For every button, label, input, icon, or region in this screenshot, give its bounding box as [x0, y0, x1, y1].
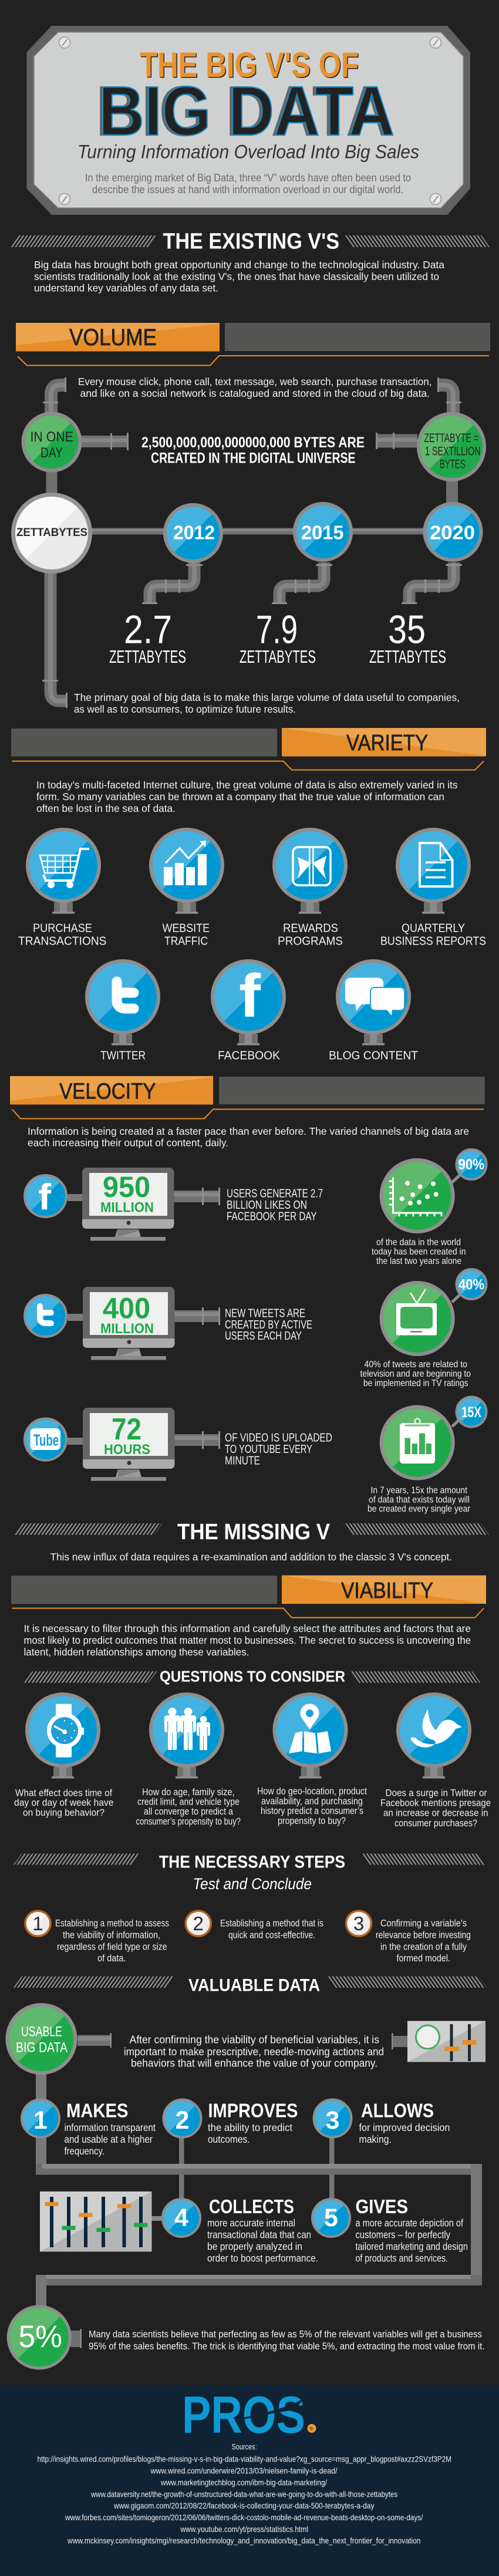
caption: What effect does time of: [15, 1788, 112, 1799]
text: the ability to predict: [208, 2122, 292, 2133]
caption: In 7 years, 15x the amount: [371, 1485, 467, 1496]
caption: an increase or decrease in: [383, 1808, 488, 1819]
question: social surge: [380, 1694, 491, 1829]
stat: 7.9 zettabytes: 7.9: [256, 607, 298, 652]
sources: www.dataversity.net/the-growth-of-unstructured-data-what-are-we-going-to-do-with-all-those-zettabytes: [90, 2489, 397, 2499]
monitor: 400 million: MILLION: [100, 1321, 154, 1337]
subheading: test and conclude: Test and Conclude: [193, 1875, 312, 1893]
step: makes: MAKES: [66, 2099, 128, 2122]
step: makes: [22, 2099, 156, 2157]
label: [278, 922, 343, 948]
heading: the existing v's: [9, 229, 490, 254]
step: allows: ALLOWS: [361, 2099, 434, 2122]
text: [376, 1917, 471, 1964]
text: variety intro: [36, 779, 458, 814]
caption: on buying behavior?: [23, 1808, 104, 1818]
circle: in one day: DAY: [41, 445, 63, 461]
label: REWARDS: [283, 922, 338, 935]
label: PURCHASE: [33, 922, 92, 935]
text: Confirming a variable’s: [380, 1917, 467, 1929]
label: FACEBOOK: [218, 1050, 281, 1063]
text: NEW TWEETS ARE: [225, 1307, 305, 1320]
icon: control panel: [407, 2021, 485, 2062]
section bar: viability: [11, 1576, 486, 1618]
text: variety intro: form. So many variables can be thrown at a company that the true value of information can: [36, 791, 444, 803]
icon: facebook circle: [25, 1175, 66, 1218]
text: [227, 1187, 323, 1223]
text: missing v intro: This new influx of data requires a re-examination and addition to the classic 3 V's concept.: [50, 1551, 452, 1563]
step: gives: GIVES: [356, 2196, 408, 2217]
logo: pros: ®: [309, 2426, 313, 2432]
stat: 90%: [372, 1149, 486, 1266]
icon item: purchase transactions: [18, 830, 107, 948]
icon: watch: [47, 1704, 84, 1758]
circle: 2012: [165, 505, 221, 561]
icon item: twitter: [87, 961, 159, 1063]
text: velocity intro: Information is being created at a faster pace than ever before. The varied channels of big data are: [28, 1125, 469, 1137]
heading: the missing v: [14, 1520, 489, 1545]
question: geo-location: [257, 1694, 367, 1826]
label: [18, 922, 107, 948]
text: for improved decision: [359, 2122, 450, 2133]
circle: 5%: 5%: [19, 2319, 62, 2354]
text: existing v's intro: [34, 259, 444, 294]
icon: youtube circle: Tube: [33, 1431, 59, 1449]
heading: valuable data: VALUABLE DATA: [188, 1976, 320, 1995]
icon: facebook circle: f: [38, 1177, 51, 1218]
text: 5% explanation: [89, 2328, 485, 2352]
text: be properly analyzed in: [207, 2240, 302, 2252]
caption: consumer purchases?: [395, 1818, 477, 1829]
monitor: 400 million: [83, 1287, 175, 1360]
caption: history predict a consumer’s: [261, 1806, 363, 1816]
icon item: quarterly business reports: [380, 830, 486, 948]
pipes: [68, 1307, 220, 1325]
circle: zettabyte definition: [419, 414, 484, 480]
circle: 5%: [8, 2307, 70, 2368]
text: viability intro: [23, 1623, 471, 1658]
text: [208, 2122, 292, 2145]
caption: of the data in the world: [376, 1238, 461, 1247]
text: every mouse click: [78, 376, 432, 399]
badge: 15X: [461, 1404, 481, 1421]
text: regardless of field type or size: [57, 1941, 167, 1953]
sources: www.mckinsey.com/insights/mgi/research/technology_and_innovation/big_data_the_next_frontier_for_innovation: [67, 2536, 420, 2545]
stat: 35 zettabytes: 35: [388, 607, 426, 652]
caption: Facebook mentions presage: [380, 1798, 491, 1808]
text: after confirming: After confirming the viability of beneficial variables, it is: [129, 2034, 379, 2045]
caption: be created every single year: [367, 1504, 471, 1514]
text: variety intro: In today’s multi-faceted Internet culture, the great volume of data is also extremely varied in its: [36, 779, 458, 791]
monitor: 72 hours: HOURS: [104, 1442, 150, 1458]
text: primary goal: [74, 692, 460, 715]
step: makes: 1: [33, 2106, 48, 2135]
caption: day or day of week have: [14, 1798, 114, 1808]
monitor: 950 million: 950: [103, 1171, 150, 1203]
label: WEBSITE: [162, 922, 210, 935]
text: after confirming: [124, 2034, 384, 2069]
text: existing v's intro: understand key variables of any data set.: [34, 282, 218, 294]
stat: 2.7 zettabytes: ZETTABYTES: [109, 646, 186, 667]
text: transactional data that can: [207, 2228, 311, 2240]
badge: [457, 1149, 486, 1179]
icon: map pin: [289, 1704, 331, 1754]
icon item: facebook: [213, 961, 284, 1063]
stat: 7.9 zettabytes: ZETTABYTES: [240, 646, 316, 667]
circle: 2020: [425, 504, 481, 560]
icon: youtube circle: [25, 1418, 66, 1461]
text: [220, 1917, 323, 1941]
section bar: variety: [11, 728, 486, 770]
text: MINUTE: [225, 1455, 260, 1468]
icon: facebook f: f: [239, 962, 261, 1030]
caption: credit limit, and vehicle type: [137, 1796, 240, 1807]
stat: 40%: [360, 1269, 486, 1388]
row: new tweets: [25, 1287, 312, 1360]
step: improves: [163, 2099, 298, 2145]
stat: 15x: [367, 1397, 486, 1514]
title plaque: [27, 26, 470, 215]
text: bytes created: 2,500,000,000,000000,000 BYTES ARE: [141, 434, 365, 451]
text: frequency.: [65, 2145, 104, 2157]
circle: in one day: [23, 413, 80, 471]
sources: www.gigaom.com/2012/08/22/facebook-is-collecting-your-data-500-terabytes-a-day: [113, 2501, 375, 2510]
text: CREATED BY ACTIVE: [225, 1319, 312, 1331]
text: [359, 2122, 450, 2145]
text: the viability of information,: [63, 1929, 160, 1941]
caption: propensity to buy?: [278, 1816, 346, 1826]
text: viability intro: It is necessary to filter through this information and carefully select the attributes and factors that are: [23, 1623, 471, 1634]
text: [356, 2217, 468, 2264]
monitor: 950 million: MILLION: [100, 1200, 154, 1215]
icon item: rewards programs: [274, 830, 346, 948]
icon: gift: [293, 847, 331, 885]
pipes: [68, 1188, 220, 1205]
badge: 90%: [458, 1156, 484, 1173]
icon: twitter t: [117, 982, 134, 1009]
caption: [360, 1360, 471, 1388]
text: BILLION LIKES ON: [227, 1199, 307, 1212]
caption: [257, 1786, 367, 1826]
section bar: volume: VOLUME: [69, 325, 157, 350]
text: customers – for perfectly: [356, 2228, 450, 2240]
caption: television and are beginning to: [360, 1369, 471, 1379]
section bar: variety: VARIETY: [346, 731, 428, 756]
caption: today has been created in: [372, 1247, 466, 1257]
sources: [38, 2442, 451, 2545]
icon: shopping cart: [40, 849, 89, 888]
caption: How do geo-location, product: [257, 1786, 367, 1796]
text: of data.: [97, 1953, 126, 1964]
stat: 2.7 zettabytes: [109, 607, 186, 667]
caption: be implemented in TV ratings: [363, 1378, 468, 1388]
caption: availability, and purchasing: [261, 1796, 363, 1807]
text: after confirming: important to make prescriptive, needle-moving actions and: [124, 2045, 384, 2058]
caption: [372, 1238, 466, 1266]
caption: consumer’s propensity to buy?: [136, 1816, 241, 1827]
logo: pros: PROS: [182, 2385, 305, 2444]
text: quick and cost-effective.: [228, 1929, 315, 1941]
label: BUSINESS REPORTS: [380, 935, 486, 948]
label: BLOG CONTENT: [329, 1050, 418, 1063]
row: youtube hours: [25, 1408, 332, 1481]
circle: usable big data: [7, 2005, 75, 2073]
circle: 2012: 2012: [173, 521, 215, 544]
step 1: [25, 1911, 169, 1964]
caption: [380, 1788, 491, 1829]
heading: questions to consider: [24, 1667, 480, 1685]
text: primary goal: The primary goal of big data is to make this large volume of data useful to companies,: [74, 692, 460, 703]
caption: of data that exists today will: [369, 1495, 470, 1505]
step 3: 3: [353, 1913, 364, 1934]
heading: the missing v: THE MISSING V: [177, 1520, 331, 1545]
step 3: [346, 1911, 471, 1964]
caption: all converge to predict a: [144, 1806, 234, 1817]
circle: zettabytes: [13, 494, 90, 572]
pipes: [68, 1431, 220, 1449]
stat: 35 zettabytes: ZETTABYTES: [369, 646, 446, 667]
text: every mouse click: Every mouse click, phone call, text message, web search, purchase transaction,: [78, 376, 432, 387]
pipes: valuable data network: [36, 2033, 482, 2348]
badge: 40%: [458, 1276, 484, 1293]
text: [55, 1917, 169, 1964]
sources: www.marketingtechblog.com/ibm-big-data-marketing/: [160, 2477, 327, 2487]
text: [225, 1431, 332, 1468]
label: [162, 922, 210, 948]
step: collects: COLLECTS: [209, 2196, 294, 2217]
step: gives: 5: [324, 2204, 338, 2232]
title: the big v's of: THE BIG V'S OF: [140, 45, 359, 85]
text: relevance before investing: [376, 1929, 471, 1941]
icon: twitter circle: [25, 1295, 66, 1337]
caption: 40% of tweets are related to: [364, 1360, 467, 1370]
text: bytes created: [141, 434, 365, 466]
text: making.: [359, 2133, 392, 2145]
text: tailored marketing and design: [356, 2240, 468, 2252]
circle: zettabyte definition: BYTES: [440, 458, 465, 471]
step: allows: [313, 2099, 450, 2145]
step: allows: 3: [326, 2106, 339, 2135]
icon item: blog content: [329, 961, 418, 1063]
icon: sliders panel: [40, 2191, 151, 2252]
badge: [457, 1269, 486, 1299]
step: improves: IMPROVES: [208, 2099, 298, 2122]
text: USERS EACH DAY: [225, 1330, 302, 1343]
badge: [457, 1397, 486, 1427]
title: big data: BIG DATA: [99, 72, 395, 150]
step: improves: 2: [176, 2106, 189, 2135]
caption: Does a surge in Twitter or: [385, 1788, 487, 1799]
question: time of day: [14, 1694, 114, 1818]
icon: chat bubbles: [345, 978, 404, 1016]
text: velocity intro: each increasing their output of content, daily.: [28, 1137, 228, 1148]
caption: the last two years alone: [376, 1256, 461, 1266]
circle: 2020: 2020: [430, 521, 475, 544]
text: bytes created: CREATED IN THE DIGITAL UNIVERSE: [151, 450, 356, 466]
heading: the existing v's: THE EXISTING V'S: [163, 229, 339, 254]
text: every mouse click: and like on a social network is catalogued and stored in the cloud of big data.: [80, 387, 430, 399]
heading: the necessary steps: [14, 1853, 487, 1872]
text: Establishing a method that is: [220, 1917, 323, 1929]
label: TRANSACTIONS: [18, 935, 107, 948]
text: [225, 1307, 312, 1343]
monitor: 72 hours: 72: [112, 1412, 141, 1447]
sources: Sources:: [231, 2442, 257, 2452]
icon: bird: [410, 1709, 462, 1748]
intro text: describe the issues at hand with information overload in our digital world.: [92, 184, 403, 195]
text: after confirming: behaviors that will enhance the value of your company.: [131, 2057, 377, 2069]
step: collects: 4: [174, 2204, 188, 2232]
heading: valuable data: [14, 1976, 487, 1995]
monitor: 400 million: 400: [103, 1292, 150, 1324]
stat: 7.9 zettabytes: [240, 607, 316, 667]
step 1: 1: [32, 1913, 43, 1934]
text: viability intro: latent, hidden relationships among these variables.: [23, 1646, 249, 1658]
circle: in one day: IN ONE: [31, 429, 73, 445]
intro text: In the emerging market of Big Data, three “V” words have often been used to: [85, 172, 411, 184]
text: viability intro: most likely to predict outcomes that matter most to businesses. The secret to success is uncovering the: [23, 1634, 471, 1646]
text: formed model.: [397, 1953, 450, 1964]
question: demographics: [136, 1694, 241, 1827]
pipes: years to totals: [142, 562, 462, 604]
label: TWITTER: [100, 1050, 146, 1063]
text: USERS GENERATE 2.7: [227, 1187, 323, 1200]
text: Establishing a method to assess: [55, 1917, 169, 1929]
caption: [367, 1485, 471, 1514]
text: OF VIDEO IS UPLOADED: [225, 1431, 332, 1444]
section bar: viability: VIABILITY: [341, 1579, 433, 1603]
text: primary goal: as well as to consumers, to optimize future results.: [74, 703, 296, 715]
label: QUARTERLY: [402, 922, 465, 935]
text: in the creation of a fully: [380, 1941, 467, 1953]
text: a more accurate depiction of: [356, 2217, 463, 2228]
caption: [14, 1788, 114, 1818]
circle: 2015: [295, 504, 351, 560]
monitor: 950 million: [82, 1168, 174, 1241]
text: and usable at a higher: [65, 2133, 153, 2145]
text: existing v's intro: Big data has brought both great opportunity and change to the technological industry. Data: [34, 259, 444, 271]
text: [65, 2122, 156, 2157]
circle: 2015: 2015: [301, 521, 344, 544]
text: existing v's intro: scientists traditionally look at the existing V's, the ones that have classically been utilized to: [34, 271, 439, 282]
heading: the necessary steps: THE NECESSARY STEPS: [159, 1853, 345, 1872]
text: more accurate internal: [207, 2217, 295, 2228]
icon: clipboard chart: [400, 1418, 435, 1464]
icon: document: [420, 843, 452, 886]
text: order to boost performance.: [207, 2252, 318, 2264]
sources: www.forbes.com/sites/tomiogeron/2012/06/06/twitters-dick-costolo-mobile-ad-revenue-beats-desktop-on-some-days/: [65, 2513, 423, 2522]
circle: usable big data: BIG DATA: [16, 2039, 68, 2056]
label: [380, 922, 486, 948]
step 2: 2: [193, 1913, 204, 1934]
circle: zettabytes: ZETTABYTES: [16, 527, 87, 539]
text: of products and services.: [356, 2252, 448, 2264]
text: outcomes.: [208, 2133, 250, 2145]
sources: www.youtube.com/yt/press/statistics.html: [180, 2524, 308, 2534]
step: gives: [312, 2196, 468, 2264]
stat: 35 zettabytes: [369, 607, 446, 667]
icon item: website traffic: [151, 830, 222, 948]
pipes: volume network: [42, 377, 461, 708]
text: velocity intro: [28, 1125, 469, 1148]
text: information transparent: [65, 2122, 156, 2133]
caption: [136, 1787, 241, 1827]
intro text: [85, 172, 411, 195]
section bar: velocity: VELOCITY: [59, 1079, 156, 1104]
text: [207, 2217, 318, 2264]
icon: people: [164, 1708, 210, 1750]
icon: scatter plot: [389, 1178, 443, 1216]
heading: questions to consider: QUESTIONS TO CONSIDER: [160, 1667, 345, 1685]
icon: television: [396, 1289, 437, 1335]
icon: bar chart with arrow: [164, 841, 207, 885]
section bar: velocity: [10, 1076, 485, 1119]
stat: 2.7 zettabytes: 2.7: [124, 607, 172, 652]
section bar: volume: [16, 323, 490, 365]
label: TRAFFIC: [164, 935, 208, 948]
step 2: [186, 1911, 323, 1941]
label: PROGRAMS: [278, 935, 343, 948]
text: variety intro: often be lost in the sea of data.: [36, 803, 176, 814]
subtitle: Turning Information Overload Into Big Sales: [77, 141, 419, 162]
circle: usable big data: USABLE: [21, 2024, 62, 2039]
row: facebook likes: [25, 1168, 323, 1241]
sources: www.wired.com/underwire/2013/03/nielsen-family-is-dead/: [150, 2466, 338, 2475]
footer band: [0, 2385, 499, 2576]
monitor: 72 hours: [83, 1408, 175, 1481]
text: TO YOUTUBE EVERY: [225, 1443, 312, 1456]
text: FACEBOOK PER DAY: [227, 1211, 317, 1223]
icon: screws: [59, 37, 441, 204]
step: collects: [163, 2196, 318, 2264]
caption: How do age, family size,: [142, 1787, 235, 1798]
